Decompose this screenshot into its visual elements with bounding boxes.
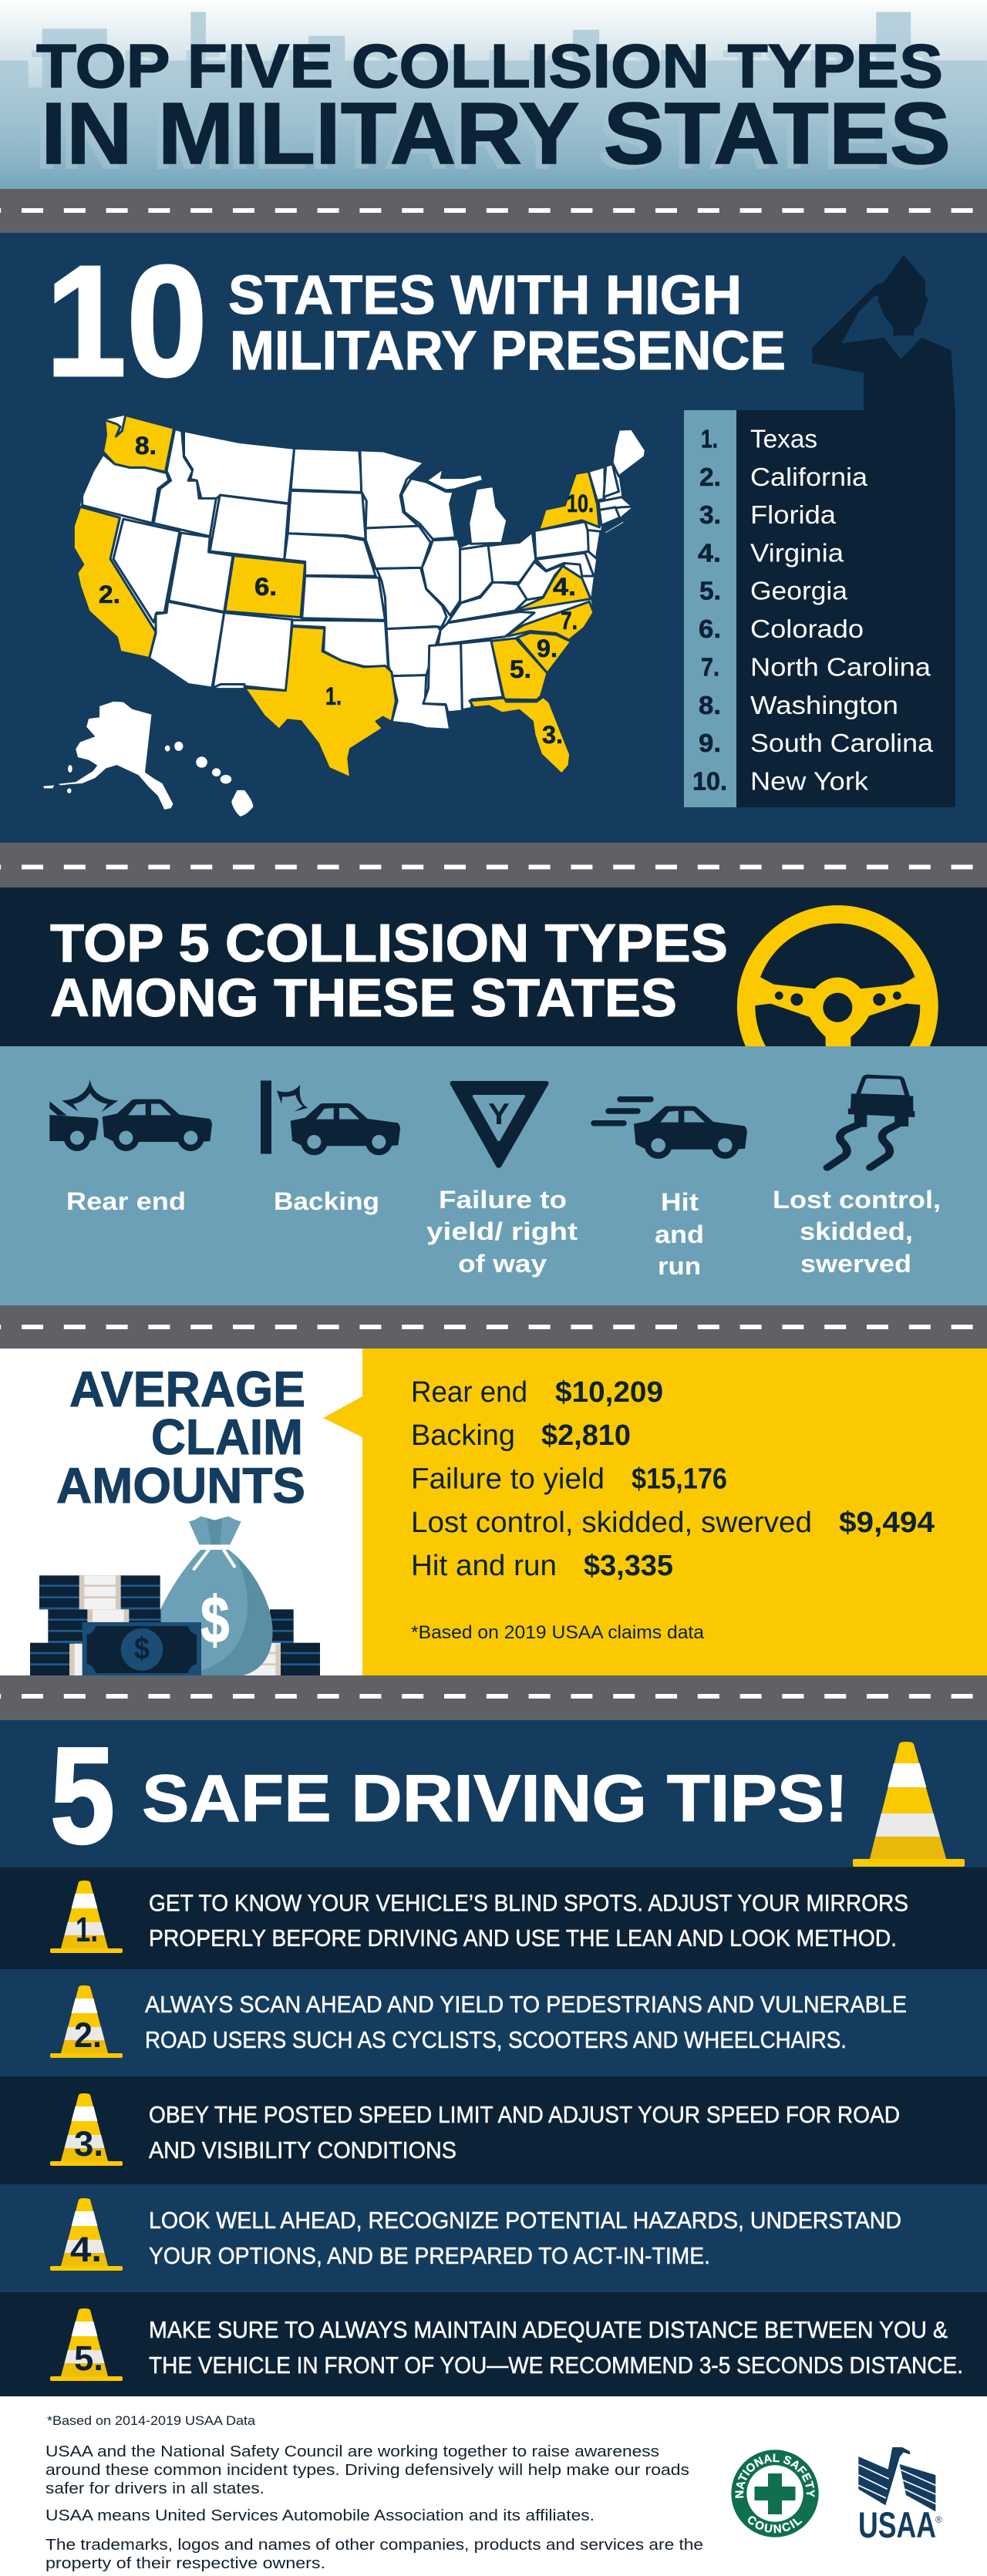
tip 4 text: YOUR OPTIONS, AND BE PREPARED TO ACT-IN-TIME. [149, 2242, 710, 2269]
logo: National Safety Council: NATIONAL SAFETY [735, 2453, 814, 2498]
claim amounts list: Lost control, skidded, swerved [411, 1507, 812, 1539]
claims data footnote: *Based on 2019 USAA claims data [411, 1622, 705, 1643]
collision type labels: yield/ right [426, 1217, 578, 1245]
road divider 1 [0, 189, 987, 233]
state ranking list: 9. [699, 729, 721, 757]
icon: money bag and cash stacks: $ [134, 1632, 150, 1666]
title shadow [31, 37, 944, 187]
icon: money bag and cash stacks: $ [200, 1584, 229, 1657]
state ranking list [684, 410, 955, 807]
icon: yield sign: Y [488, 1098, 510, 1131]
tip 5 [0, 2292, 987, 2396]
panel: safe driving tips heading [0, 1719, 987, 1872]
claim amounts list: $2,810 [541, 1419, 631, 1452]
footer disclaimer text: around these common incident types. Driving defensively will help make our roads [45, 2462, 689, 2479]
logo: USAA: ® [935, 2514, 942, 2525]
footer disclaimer text: *Based on 2014-2019 USAA Data [47, 2413, 256, 2428]
claim amounts list: Rear end [411, 1376, 527, 1409]
heading: AMOUNTS [56, 1457, 305, 1514]
icon: hit and run car [594, 1099, 747, 1159]
heading: 10 states [45, 233, 786, 409]
road divider 4 [0, 1675, 987, 1720]
state ranking list: Colorado [750, 615, 864, 643]
logo: USAA [858, 2447, 942, 2545]
footer disclaimer text: property of their respective owners. [45, 2555, 325, 2572]
state ranking list: 4. [698, 539, 721, 567]
icon: cone 3: 3. [74, 2124, 103, 2164]
claim amounts list: $10,209 [555, 1376, 663, 1409]
claim amounts list: Failure to yield [411, 1463, 605, 1496]
claim amounts list: $3,335 [584, 1550, 673, 1582]
tip 4 text: LOOK WELL AHEAD, RECOGNIZE POTENTIAL HAZARDS, UNDERSTAND [149, 2207, 901, 2234]
icon: cone 1: 1. [76, 1910, 98, 1949]
icon: rear end collision [49, 1079, 212, 1151]
map state number labels: 3. [542, 721, 563, 749]
state ranking list: North Carolina [750, 652, 931, 682]
icon: cone 4 [50, 2198, 123, 2271]
state ranking list: New York [750, 766, 869, 796]
panel: states with high military presence [0, 233, 987, 843]
claim amounts list [411, 1376, 935, 1582]
US map [43, 416, 645, 817]
heading: 10 states: MILITARY PRESENCE [230, 321, 786, 382]
heading: 5 safe driving tips: SAFE DRIVING TIPS! [142, 1762, 848, 1836]
state ranking list: 6. [699, 615, 721, 643]
collision type labels: Failure to [439, 1186, 567, 1214]
tip 3 text: OBEY THE POSTED SPEED LIMIT AND ADJUST YOUR SPEED FOR ROAD [149, 2101, 900, 2128]
state ranking list: Texas [750, 425, 817, 453]
title shadow: TOP FIVE COLLISION TYPES [31, 37, 938, 106]
icon: steering wheel [746, 914, 929, 1097]
callout arrow [323, 1396, 362, 1437]
state ranking list: 2. [699, 463, 721, 491]
collision type labels: skidded, [800, 1217, 913, 1245]
map state number labels: 2. [99, 581, 120, 608]
state ranking list: 10. [692, 766, 727, 796]
footer disclaimer text: USAA means United Services Automobile Association and its affiliates. [45, 2507, 595, 2524]
state ranking list: California [750, 463, 868, 491]
map state number labels: 1. [325, 682, 342, 710]
heading [56, 1361, 305, 1514]
heading [50, 913, 728, 1028]
heading: 10 states: STATES WITH HIGH [228, 265, 742, 326]
footer disclaimer text: The trademarks, logos and names of other companies, products and services are the [45, 2537, 703, 2554]
footer disclaimer text [45, 2413, 703, 2572]
icon: skidding car [827, 1075, 915, 1167]
map state number labels: 7. [561, 607, 578, 635]
tip 4 text [149, 2207, 901, 2269]
collision type labels [66, 1186, 941, 1280]
road divider 3 [0, 1305, 987, 1349]
state ranking list: Washington [750, 691, 898, 719]
icon: cone 2: 2. [74, 2015, 102, 2055]
heading: AVERAGE [69, 1361, 305, 1417]
collision type labels: swerved [800, 1250, 911, 1278]
claim amounts list: Backing [411, 1419, 515, 1452]
collision type labels: of way [458, 1250, 547, 1278]
icon: money bag and cash stacks [30, 1517, 320, 1677]
title shadow: IN MILITARY STATES [34, 90, 944, 187]
icon: backing into wall [261, 1081, 400, 1155]
collision type labels: Hit [661, 1188, 699, 1216]
road divider 2 [0, 843, 987, 887]
icon: large traffic cone [853, 1742, 965, 1867]
tip 2 text: ALWAYS SCAN AHEAD AND YIELD TO PEDESTRIANS AND VULNERABLE [145, 1991, 907, 2018]
footer disclaimer text: safer for drivers in all states. [45, 2480, 264, 2497]
state ranking list: 3. [699, 500, 721, 529]
heading: 5 safe driving tips [50, 1719, 848, 1872]
heading: CLAIM [151, 1409, 303, 1465]
claim amounts list: $15,176 [632, 1463, 727, 1496]
tip 1 text [149, 1889, 908, 1951]
map state number labels: 5. [510, 655, 531, 683]
tip 1 text: GET TO KNOW YOUR VEHICLE’S BLIND SPOTS. ADJUST YOUR MIRRORS [149, 1889, 908, 1917]
tip 2 text: ROAD USERS SUCH AS CYCLISTS, SCOOTERS AND WHEELCHAIRS. [145, 2026, 847, 2053]
map state number labels [99, 432, 594, 749]
state ranking list: Florida [750, 500, 837, 529]
state ranking list: 7. [701, 652, 719, 682]
panel: collision type icons [0, 1046, 987, 1305]
tip 3 text [149, 2101, 900, 2164]
icon: cone 3 [50, 2093, 123, 2166]
map state number labels: 9. [537, 635, 558, 662]
logo: National Safety Council: COUNCIL [748, 2516, 802, 2534]
panel: average claim amounts [0, 1349, 987, 1677]
icon: yield sign [453, 1083, 546, 1166]
tip 1 text: PROPERLY BEFORE DRIVING AND USE THE LEAN AND LOOK METHOD. [149, 1924, 897, 1951]
map state number labels: 8. [135, 432, 157, 460]
icon: cone 1 [50, 1881, 123, 1953]
collision type labels: Rear end [66, 1187, 186, 1215]
tip 1 [0, 1867, 987, 1969]
collision type labels: Backing [274, 1187, 379, 1215]
title: IN MILITARY STATES [41, 85, 951, 182]
state ranking list: 8. [699, 691, 721, 719]
header panel [0, 0, 987, 190]
tip 5 text [149, 2316, 963, 2379]
state ranking list: 5. [699, 577, 721, 605]
tip 4 [0, 2184, 987, 2292]
collision type labels: run [658, 1252, 701, 1280]
state ranking list: 1. [701, 425, 718, 453]
map state number labels: 4. [553, 573, 576, 601]
collision type labels: Lost control, [773, 1186, 941, 1214]
tip 3 [0, 2076, 987, 2184]
claim amounts list: Hit and run [411, 1550, 557, 1582]
heading: TOP 5 COLLISION TYPES [50, 913, 728, 973]
panel: top 5 collision types heading [0, 887, 987, 1097]
footer disclaimer text: USAA and the National Safety Council are working together to raise awareness [45, 2443, 659, 2460]
heading: 10 states: 10 [45, 233, 207, 409]
state ranking list: South Carolina [750, 729, 934, 757]
title [36, 32, 951, 182]
logo: USAA: USAA [858, 2504, 936, 2545]
icon: cone 4: 4. [70, 2230, 102, 2269]
tip 2 text [145, 1991, 907, 2053]
state ranking list: Virginia [750, 539, 844, 567]
heading: AMONG THESE STATES [50, 968, 677, 1028]
icon: cone 5: 5. [74, 2339, 103, 2378]
heading: 5 safe driving tips: 5 [50, 1719, 115, 1872]
map state number labels: 10. [567, 490, 594, 517]
title: TOP FIVE COLLISION TYPES [36, 32, 943, 100]
logo: National Safety Council [731, 2450, 819, 2537]
skyline [0, 12, 987, 189]
icon: cone 5 [50, 2308, 123, 2381]
collision type labels: and [655, 1221, 704, 1248]
tip 2 [0, 1969, 987, 2076]
icon: cone 2 [50, 1985, 123, 2058]
state ranking list: Georgia [750, 577, 848, 605]
icon: saluting soldier [812, 255, 955, 412]
tip 3 text: AND VISIBILITY CONDITIONS [149, 2137, 456, 2164]
map state number labels: 6. [254, 573, 277, 601]
claim amounts list: $9,494 [839, 1507, 935, 1539]
